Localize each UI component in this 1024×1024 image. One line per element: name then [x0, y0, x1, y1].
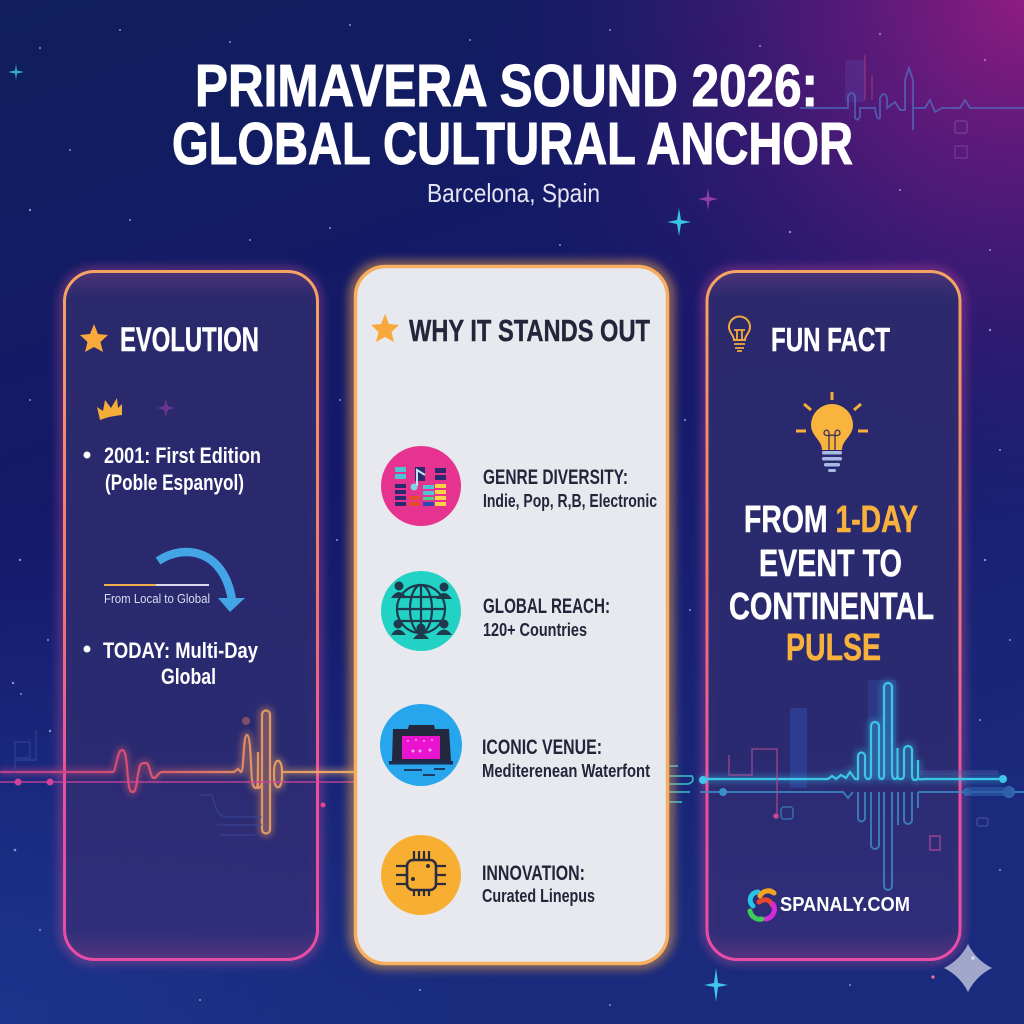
decorative star: top left	[8, 64, 24, 80]
heading: evolution: EVOLUTION	[120, 321, 259, 359]
icon: globe with people	[381, 571, 461, 651]
waveform: left pink to orange pulse	[0, 710, 355, 835]
text: genre diversity	[483, 466, 657, 511]
sparkle: bottom right	[944, 944, 992, 992]
decorative star in panel	[157, 399, 175, 417]
icon: star	[371, 314, 399, 342]
icon: glowing light bulb	[796, 392, 868, 472]
title	[172, 53, 853, 177]
text: innovation: Curated Linepus	[482, 885, 595, 906]
title: GLOBAL CULTURAL ANCHOR	[172, 111, 853, 177]
list item: today: TODAY: Multi-Day	[103, 638, 259, 663]
icon: stage venue	[380, 704, 462, 786]
panel: why it stands out card	[354, 266, 669, 964]
statement: from 1-day event to continental pulse: EVENT TO	[759, 543, 902, 585]
panel: fun fact card	[706, 271, 961, 960]
decorative star: upper middle	[667, 208, 691, 236]
text: genre diversity: Indie, Pop, R,B, Electronic	[483, 490, 657, 511]
panel: evolution card	[63, 271, 318, 960]
text: global reach	[483, 595, 610, 640]
icon: equalizer and music note	[381, 446, 461, 526]
statement: from 1-day event to continental pulse: CONTINENTAL	[729, 586, 934, 628]
statement: from 1-day event to continental pulse: FROM 1-DAY	[744, 499, 918, 541]
list item: today	[84, 638, 259, 689]
logo: spanaly.com: SPANALY.COM	[780, 893, 910, 916]
text: innovation: INNOVATION:	[482, 862, 585, 885]
title: PRIMAVERA SOUND 2026:	[195, 53, 818, 119]
list item: 2001: 2001: First Edition	[104, 443, 261, 468]
timeline line	[104, 584, 209, 586]
decorative star: bottom	[704, 968, 728, 1002]
decorative star: purple	[698, 188, 718, 210]
waveform: top right	[800, 55, 1024, 158]
fun fact content	[729, 316, 934, 919]
text: global reach: GLOBAL REACH:	[483, 595, 610, 618]
arrow: local to global	[158, 552, 245, 612]
text: iconic venue	[482, 736, 650, 781]
logo: spanaly.com	[750, 891, 910, 919]
icon: star	[80, 324, 108, 352]
text: innovation	[482, 862, 595, 906]
icon: small outline bulb	[729, 316, 750, 351]
heading: fun fact: FUN FACT	[771, 321, 890, 358]
statement: from 1-day event to continental pulse: PULSE	[786, 627, 881, 669]
waveform: right blue pulse	[668, 680, 1024, 890]
icon: crown	[97, 398, 122, 420]
text: iconic venue: ICONIC VENUE:	[482, 736, 602, 759]
text: genre diversity: GENRE DIVERSITY:	[483, 466, 628, 489]
list item: 2001: (Poble Espanyol)	[105, 470, 244, 495]
statement: from 1-day event to continental pulse	[729, 499, 934, 669]
text: global reach: 120+ Countries	[483, 619, 587, 640]
caption: from local to global: From Local to Global	[104, 592, 210, 606]
why it stands out content	[371, 313, 657, 915]
heading: why it stands out: WHY IT STANDS OUT	[409, 313, 650, 348]
list item: today: Global	[161, 664, 216, 689]
text: iconic venue: Mediterenean Waterfont	[482, 760, 650, 781]
list item: 2001	[84, 443, 261, 495]
icon: microchip	[381, 835, 461, 915]
evolution content	[80, 321, 261, 689]
subtitle: Barcelona, Spain	[427, 178, 600, 208]
